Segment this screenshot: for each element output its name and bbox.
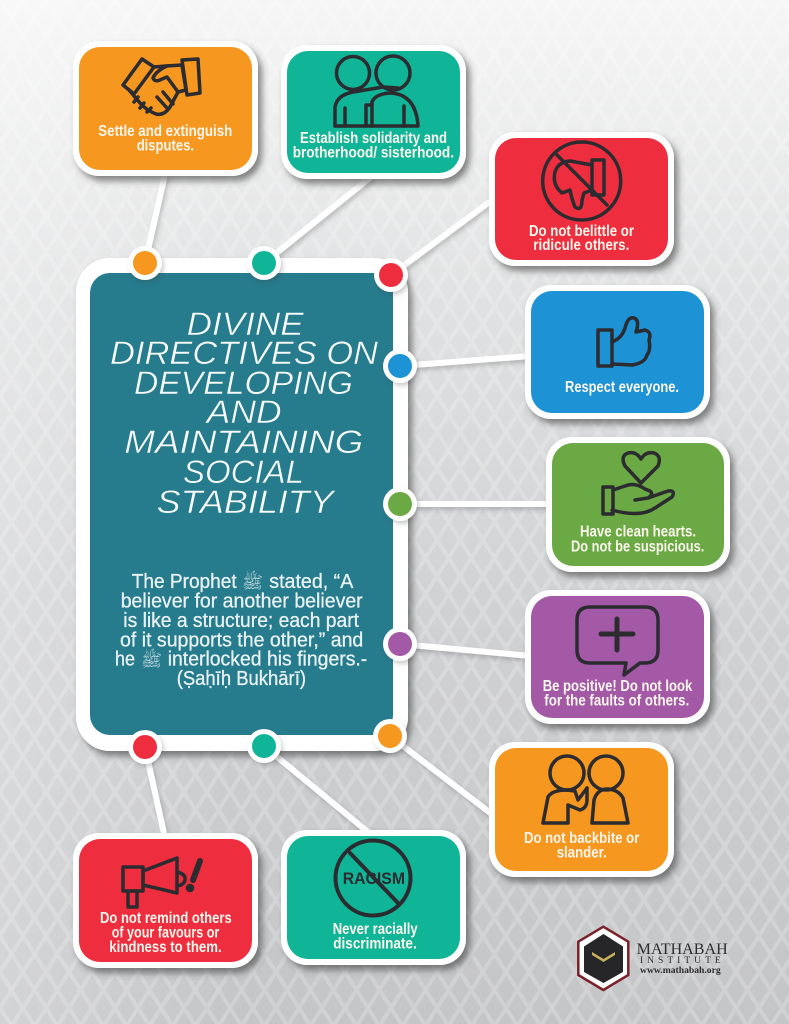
label: slander. [557, 844, 607, 861]
label: Be positive! Do not look [543, 678, 692, 695]
panel: never racially discriminate [281, 830, 466, 965]
icon: crossed thumbs down [543, 142, 621, 220]
label: Do not be suspicious. [571, 539, 704, 556]
label [529, 223, 634, 254]
hadith quote [115, 570, 367, 690]
hadith quote: ﷺ [242, 570, 263, 593]
icon: thumbs up [598, 318, 650, 366]
panel: settle disputes [73, 41, 258, 176]
label: Settle and extinguish [98, 123, 232, 140]
icon: no racism sign [336, 840, 410, 916]
hadith quote: ﷺ [141, 648, 162, 671]
icon: speech bubble with plus [577, 607, 658, 675]
label [524, 830, 639, 861]
label: discriminate. [333, 935, 417, 952]
hadith quote: interlocked his fingers.- [168, 649, 367, 671]
label [98, 123, 232, 155]
hadith quote: believer for another believer [121, 591, 363, 613]
label: Do not backbite or [524, 830, 639, 847]
label: brotherhood/ sisterhood. [293, 145, 454, 162]
logo: Mathabah Institute [578, 927, 728, 990]
connector dots [128, 246, 417, 764]
logo text: www.mathabah.org [640, 966, 721, 976]
icon: two people embracing [335, 56, 418, 126]
hadith quote: he [115, 649, 135, 671]
label: Have clean hearts. [580, 524, 696, 541]
panel: respect everyone [525, 285, 710, 419]
label: ridicule others. [533, 237, 629, 254]
icon: handshake [123, 59, 200, 114]
icon: megaphone with exclamation [123, 858, 200, 907]
title: DIRECTIVES ON [110, 335, 379, 371]
panel: main title panel [76, 258, 408, 751]
label [333, 921, 418, 952]
hadith quote: stated, “A [269, 571, 354, 593]
label [293, 130, 454, 162]
title: DEVELOPING [134, 365, 353, 401]
hadith quote: (Ṣaḥīḥ Bukhārī) [177, 668, 306, 690]
connector lines [145, 174, 552, 838]
icon: two people whispering [543, 756, 628, 823]
panel: clean hearts [546, 437, 730, 572]
label [100, 910, 232, 956]
panel: do not belittle [489, 132, 674, 266]
hadith quote: is like a structure; each part [123, 610, 359, 632]
logo text: MATHABAH [637, 941, 728, 958]
panel: solidarity [281, 45, 466, 179]
panel: do not remind others [73, 833, 258, 968]
label [571, 524, 704, 556]
icon: kaaba hexagon [578, 927, 628, 990]
panel: be positive [525, 590, 710, 724]
label: Do not belittle or [529, 223, 634, 240]
hadith quote: of it supports the other,” and [120, 630, 363, 652]
title: STABILITY [157, 484, 337, 520]
label: of your favours or [112, 925, 219, 942]
title: AND [204, 394, 282, 430]
label: Never racially [333, 921, 418, 938]
panel: do not backbite [489, 742, 674, 877]
icon: no racism sign: RACISM [343, 869, 405, 888]
label: kindness to them. [109, 939, 222, 956]
icon: heart in hand [603, 453, 673, 514]
title [110, 306, 379, 520]
label: for the faults of others. [544, 692, 689, 709]
label: Respect everyone. [565, 379, 679, 396]
label: disputes. [137, 138, 194, 155]
title: SOCIAL [183, 454, 304, 490]
hadith quote: The Prophet [132, 571, 237, 593]
title: DIVINE [187, 306, 304, 342]
label: Establish solidarity and [300, 130, 447, 147]
label: Do not remind others [100, 910, 232, 927]
title: MAINTAINING [124, 424, 363, 460]
label [543, 678, 692, 709]
logo text [637, 941, 728, 976]
logo text: INSTITUTE [640, 956, 721, 966]
